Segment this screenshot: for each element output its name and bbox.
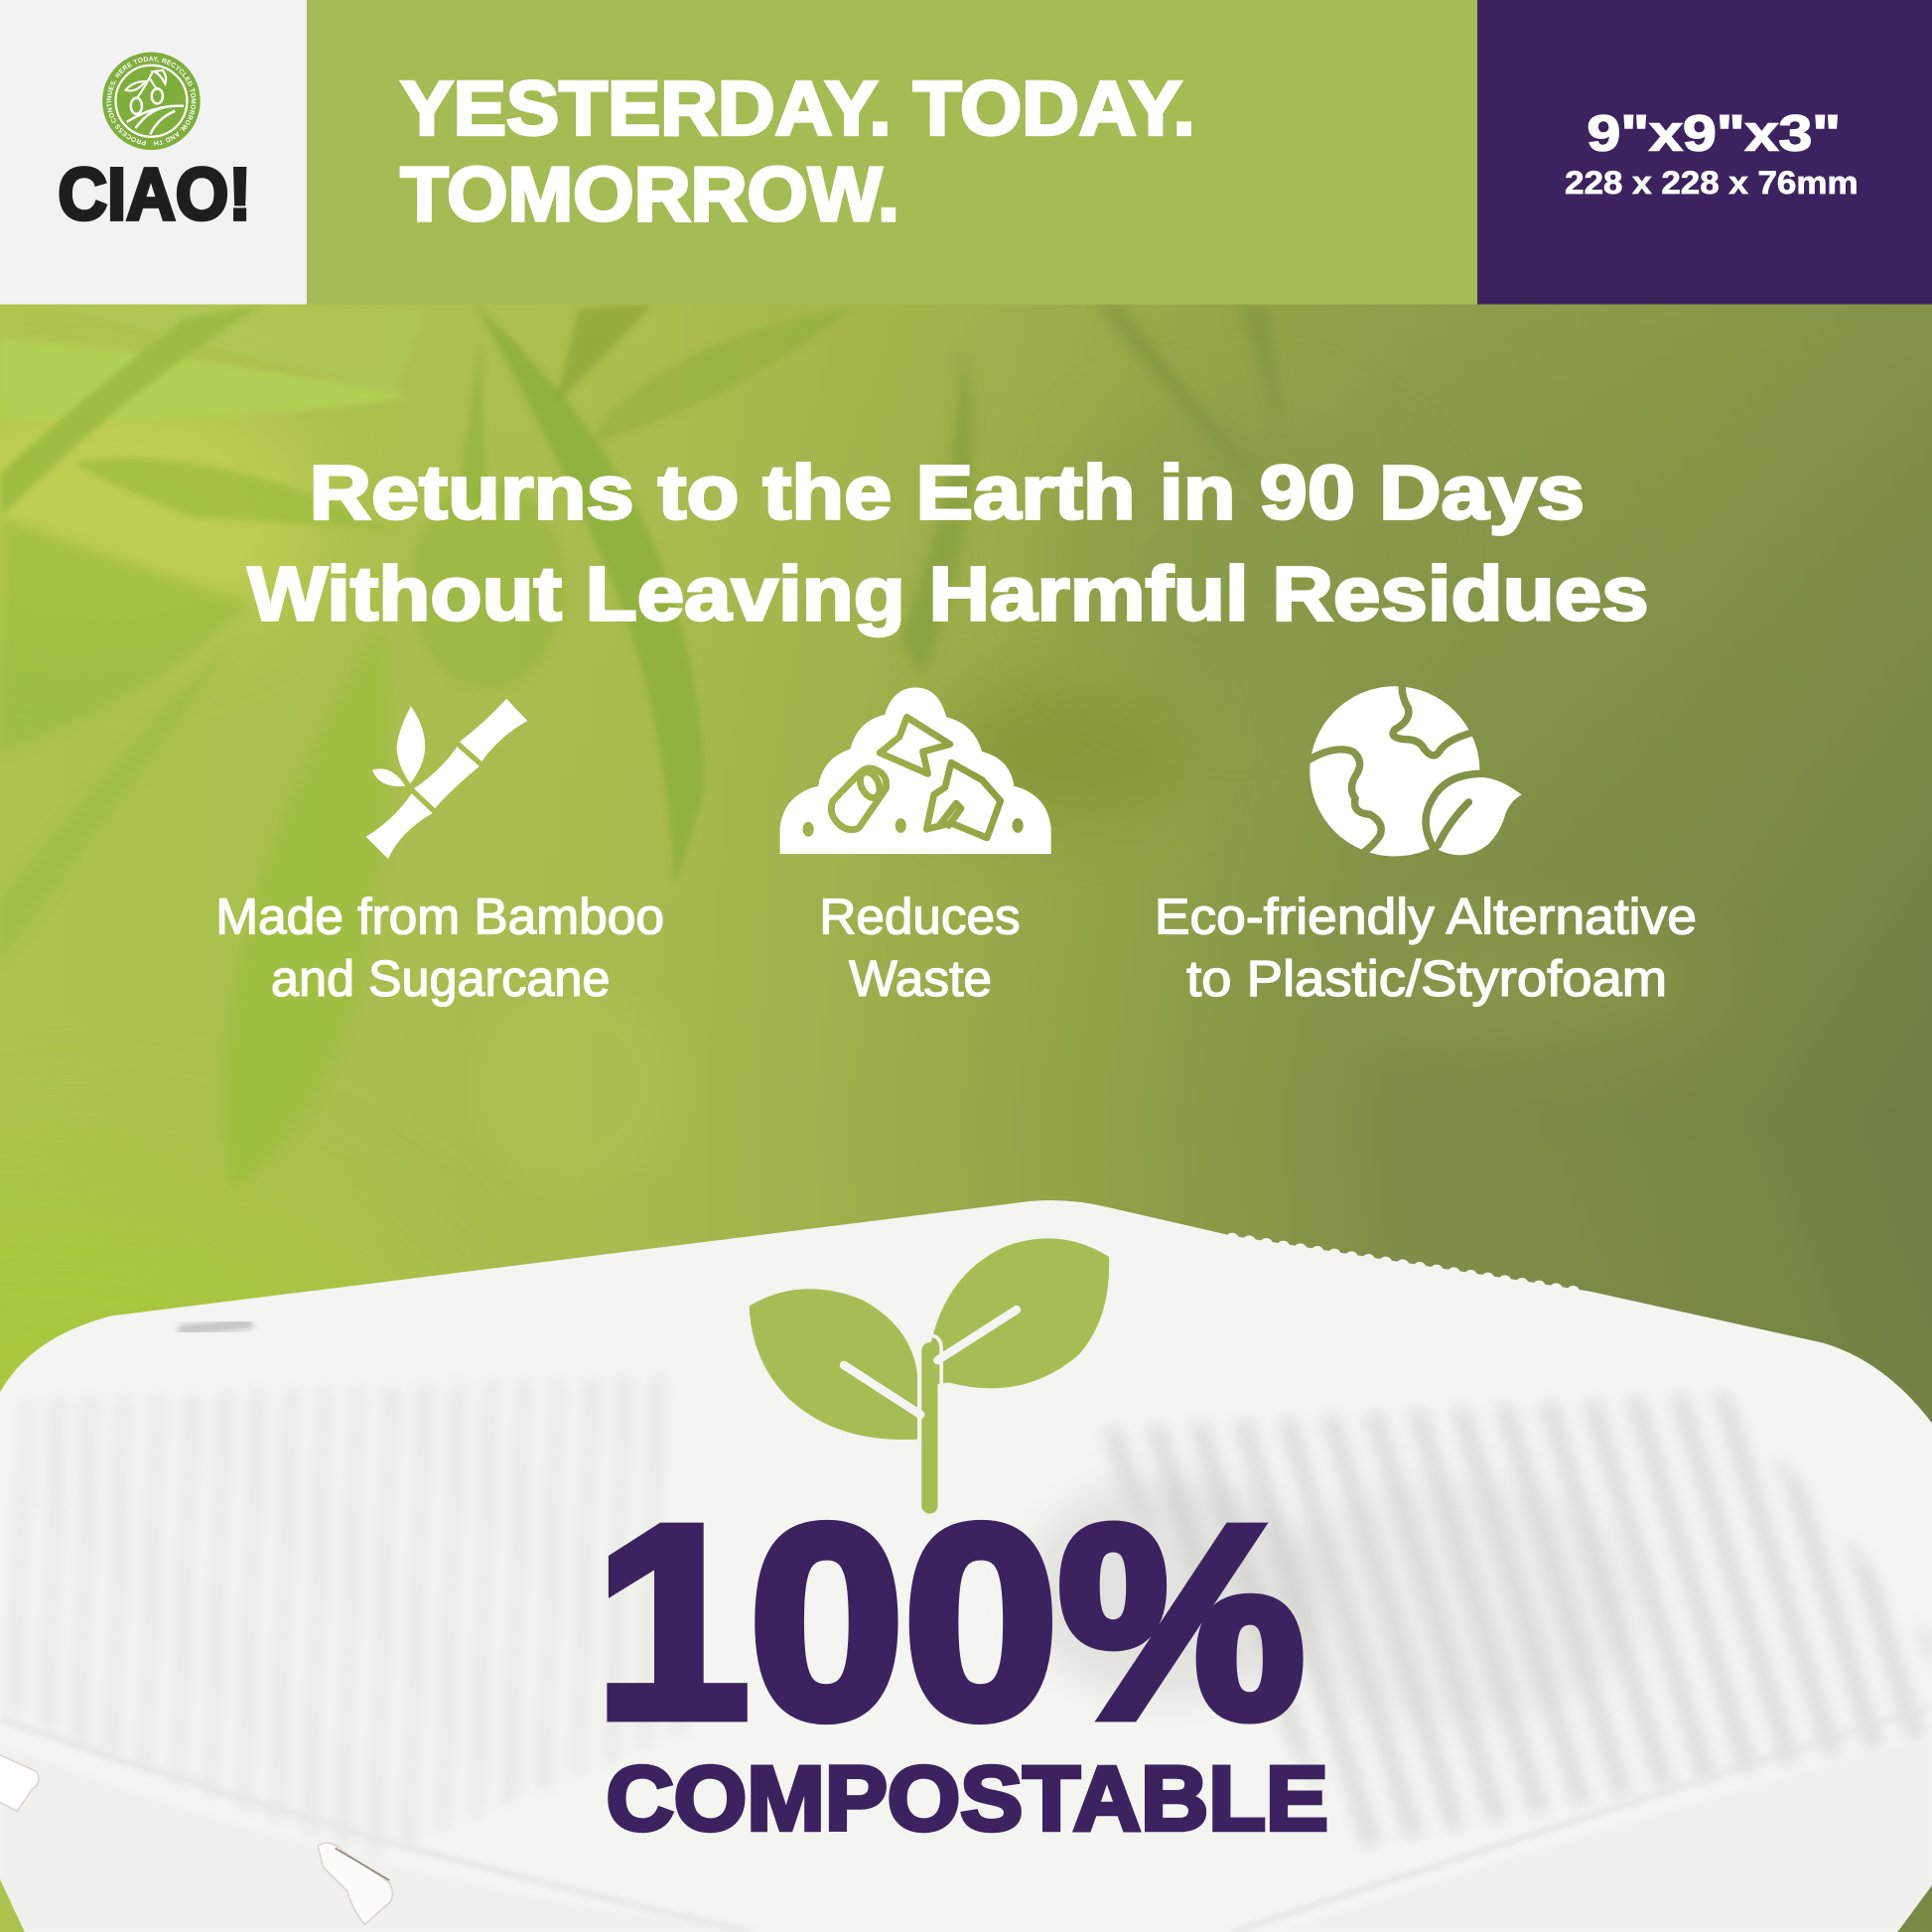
- product: compostable clamshell box: [0, 1182, 1932, 1932]
- icon: sprout: [750, 1238, 1109, 1506]
- box: shadow patches: [1035, 1479, 1601, 1704]
- feature: bamboo: [215, 699, 678, 1007]
- main heading: Without Leaving Harmful Residues: [247, 551, 1649, 636]
- label: Eco-friendly Alternative: [1155, 889, 1697, 945]
- label: Reduces: [819, 889, 1021, 945]
- dimensions mm: 228 x 228 x 76mm: [1565, 165, 1859, 201]
- box: right ribs: [1084, 1392, 1932, 1849]
- header: logo panel: [0, 0, 307, 305]
- label: to Plastic/Styrofoam: [1186, 950, 1667, 1007]
- main heading: [247, 450, 1649, 636]
- icon: bamboo: [366, 699, 527, 859]
- icon: globe and leaf: [1310, 686, 1522, 856]
- label: Made from Bamboo: [215, 889, 664, 945]
- headline: compostable: COMPOSTABLE: [607, 1748, 1328, 1850]
- slogan: YESTERDAY. TODAY.: [400, 66, 1195, 151]
- label: Waste: [849, 950, 992, 1007]
- headline: 100%: 100%: [595, 1470, 1305, 1775]
- box: tabs: [0, 1752, 392, 1925]
- main heading: Returns to the Earth in 90 Days: [310, 450, 1585, 535]
- dimensions inches: 9"x9"x3": [1587, 104, 1841, 161]
- box: lower body: [0, 1737, 1932, 1932]
- logo: circular emblem: [102, 52, 201, 150]
- header: size panel: [1477, 0, 1932, 305]
- feature: eco-friendly: [1155, 671, 1711, 1007]
- header: slogan band: [307, 0, 1477, 305]
- box: left ribs: [0, 1374, 690, 1861]
- logo: wordmark: CIAO!: [58, 153, 251, 235]
- box: scalloped hinge edge: [1232, 1240, 1589, 1295]
- feature: waste: [763, 678, 1066, 1007]
- label: and Sugarcane: [271, 950, 610, 1007]
- icon: compost mound: [780, 687, 1051, 854]
- box: lid hollow: [179, 1323, 252, 1330]
- slogan: TOMORROW.: [400, 152, 899, 237]
